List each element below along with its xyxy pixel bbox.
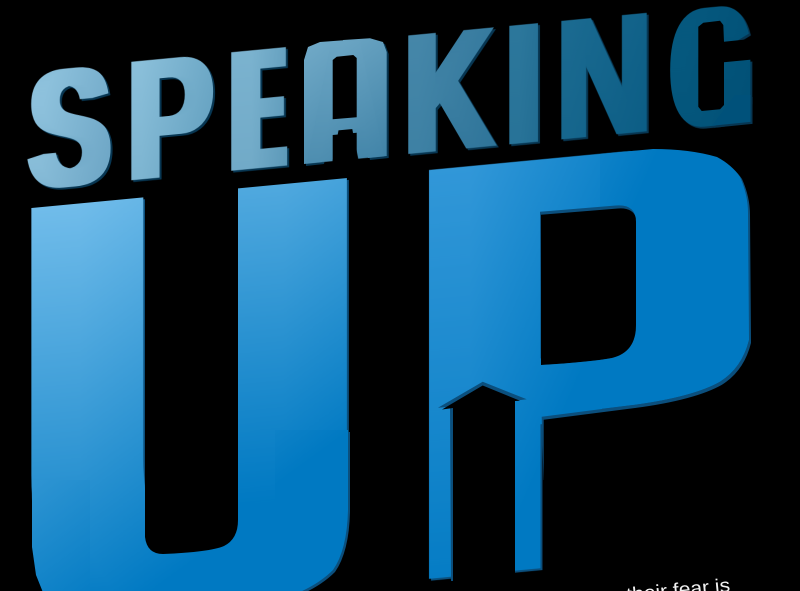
squared lower corner of G <box>712 95 750 126</box>
bowl counter of P <box>540 205 637 365</box>
squared lower-right corner of U <box>275 430 348 591</box>
icon: up arrow <box>438 382 527 591</box>
counter of U <box>145 182 238 554</box>
counter of G <box>698 21 760 111</box>
letter P with arrow cut-out <box>428 149 751 581</box>
letter U <box>28 43 350 591</box>
heading: SPEAKING <box>30 0 760 225</box>
letter G <box>673 0 760 165</box>
glyph A: A <box>310 1 381 200</box>
letter S: S <box>30 30 109 225</box>
squared lower-left corner of U <box>32 480 90 591</box>
underside of the bowl <box>542 300 800 480</box>
heading: UP <box>31 149 751 591</box>
letter A <box>304 1 387 200</box>
letter E: E <box>237 10 280 207</box>
letter P: P <box>128 18 213 218</box>
counters of A <box>333 55 357 172</box>
squared bowl of P <box>600 149 749 409</box>
shoulders of A <box>304 38 387 164</box>
